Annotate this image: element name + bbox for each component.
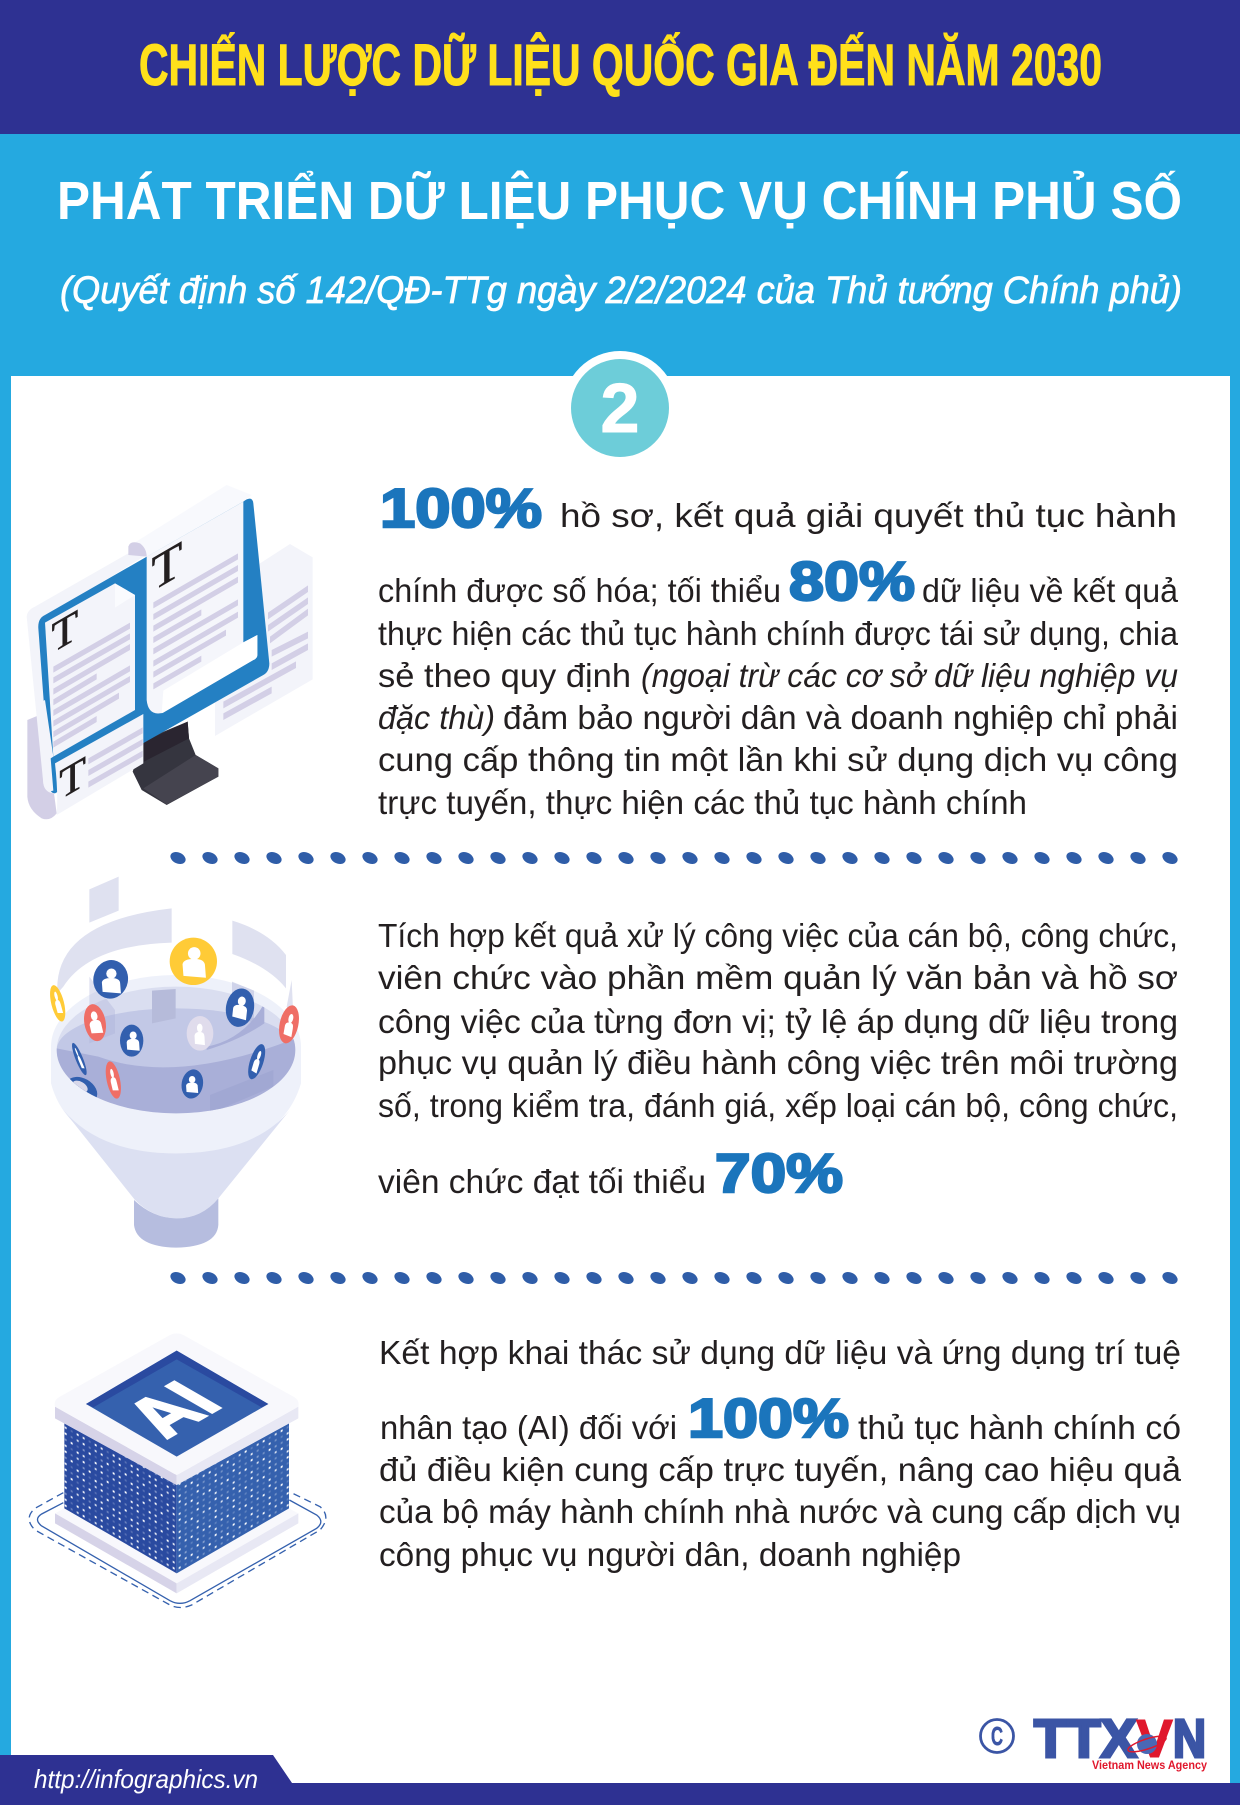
text block: work results integration: công việc của từng đơn vị; tỷ lệ áp dụng dữ liệu trong: [378, 1003, 1178, 1040]
copyright logo: [980, 1720, 1014, 1752]
icon: AI server block: AI: [107, 1372, 239, 1448]
text block: digitized records: đặc thù): [378, 699, 495, 736]
text block: AI application: thủ tục hành chính có: [858, 1409, 1181, 1446]
stat: 100%: 100%: [380, 477, 542, 539]
icon: AI server block: [29, 1333, 326, 1607]
icon: monitor with documents: T: [59, 747, 86, 810]
number badge: 2: [601, 369, 639, 447]
text block: digitized records: [378, 477, 1179, 821]
text block: work results integration: [378, 917, 1178, 1204]
stat: 100%: 100%: [688, 1387, 849, 1449]
icon: monitor with documents: T: [152, 530, 182, 603]
person icons: [47, 938, 302, 1100]
text block: AI application: công phục vụ người dân, doanh nghiệp: [379, 1536, 961, 1573]
stat: 70%: 70%: [715, 1142, 843, 1204]
text block: AI application: Kết hợp khai thác sử dụng dữ liệu và ứng dụng trí tuệ: [379, 1334, 1181, 1371]
text block: AI application: của bộ máy hành chính nhà nước và cung cấp dịch vụ: [379, 1493, 1181, 1530]
TTXVN logo: N: [1173, 1709, 1206, 1769]
icon: monitor with documents: T: [52, 600, 78, 664]
TTXVN logo: Vietnam News Agency: [1092, 1758, 1207, 1772]
text block: AI application: [379, 1334, 1182, 1573]
decision reference: (Quyết định số 142/QĐ-TTg ngày 2/2/2024 của Thủ tướng Chính phủ): [60, 270, 1182, 312]
white content panel: [11, 376, 1230, 1784]
TTXVN logo: [1034, 1709, 1207, 1772]
header band: [0, 0, 1240, 134]
text block: work results integration: viên chức vào phần mềm quản lý văn bản và hồ sơ: [378, 959, 1178, 996]
website url: http://infographics.vn: [34, 1764, 258, 1794]
stat: 80%: 80%: [789, 550, 915, 612]
text block: digitized records: cung cấp thông tin một lần khi sử dụng dịch vụ công: [378, 741, 1178, 778]
text block: digitized records: hồ sơ, kết quả giải quyết thủ tục hành: [560, 497, 1177, 534]
text block: digitized records: trực tuyến, thực hiện các thủ tục hành chính: [378, 784, 1027, 821]
text block: work results integration: số, trong kiểm tra, đánh giá, xếp loại cán bộ, công chức,: [378, 1087, 1178, 1124]
text block: AI application: đủ điều kiện cung cấp trực tuyến, nâng cao hiệu quả: [379, 1451, 1182, 1488]
text block: AI application: nhân tạo (AI) đối với: [380, 1409, 677, 1446]
text block: digitized records: chính được số hóa; tối thiểu: [378, 572, 781, 609]
icon: data funnel: [47, 877, 302, 1248]
footer bar: [0, 1755, 1240, 1805]
text block: digitized records: thực hiện các thủ tục hành chính được tái sử dụng, chia: [378, 615, 1179, 652]
text block: digitized records: sẻ theo quy định: [378, 657, 631, 694]
text block: work results integration: phục vụ quản lý điều hành công việc trên môi trường: [378, 1044, 1178, 1081]
icon: monitor with documents: [27, 485, 313, 819]
text block: digitized records: (ngoại trừ các cơ sở dữ liệu nghiệp vụ: [641, 657, 1178, 694]
text block: digitized records: đảm bảo người dân và doanh nghiệp chỉ phải: [503, 699, 1178, 736]
text block: digitized records: dữ liệu về kết quả: [922, 572, 1179, 609]
TTXVN logo: TTX: [1034, 1709, 1137, 1769]
number badge: [563, 351, 677, 465]
copyright logo: C: [991, 1721, 1003, 1751]
text block: work results integration: viên chức đạt tối thiểu: [378, 1163, 706, 1200]
text block: work results integration: Tích hợp kết quả xử lý công việc của cán bộ, công chức,: [378, 917, 1178, 954]
TTXVN logo: V: [1136, 1709, 1173, 1769]
